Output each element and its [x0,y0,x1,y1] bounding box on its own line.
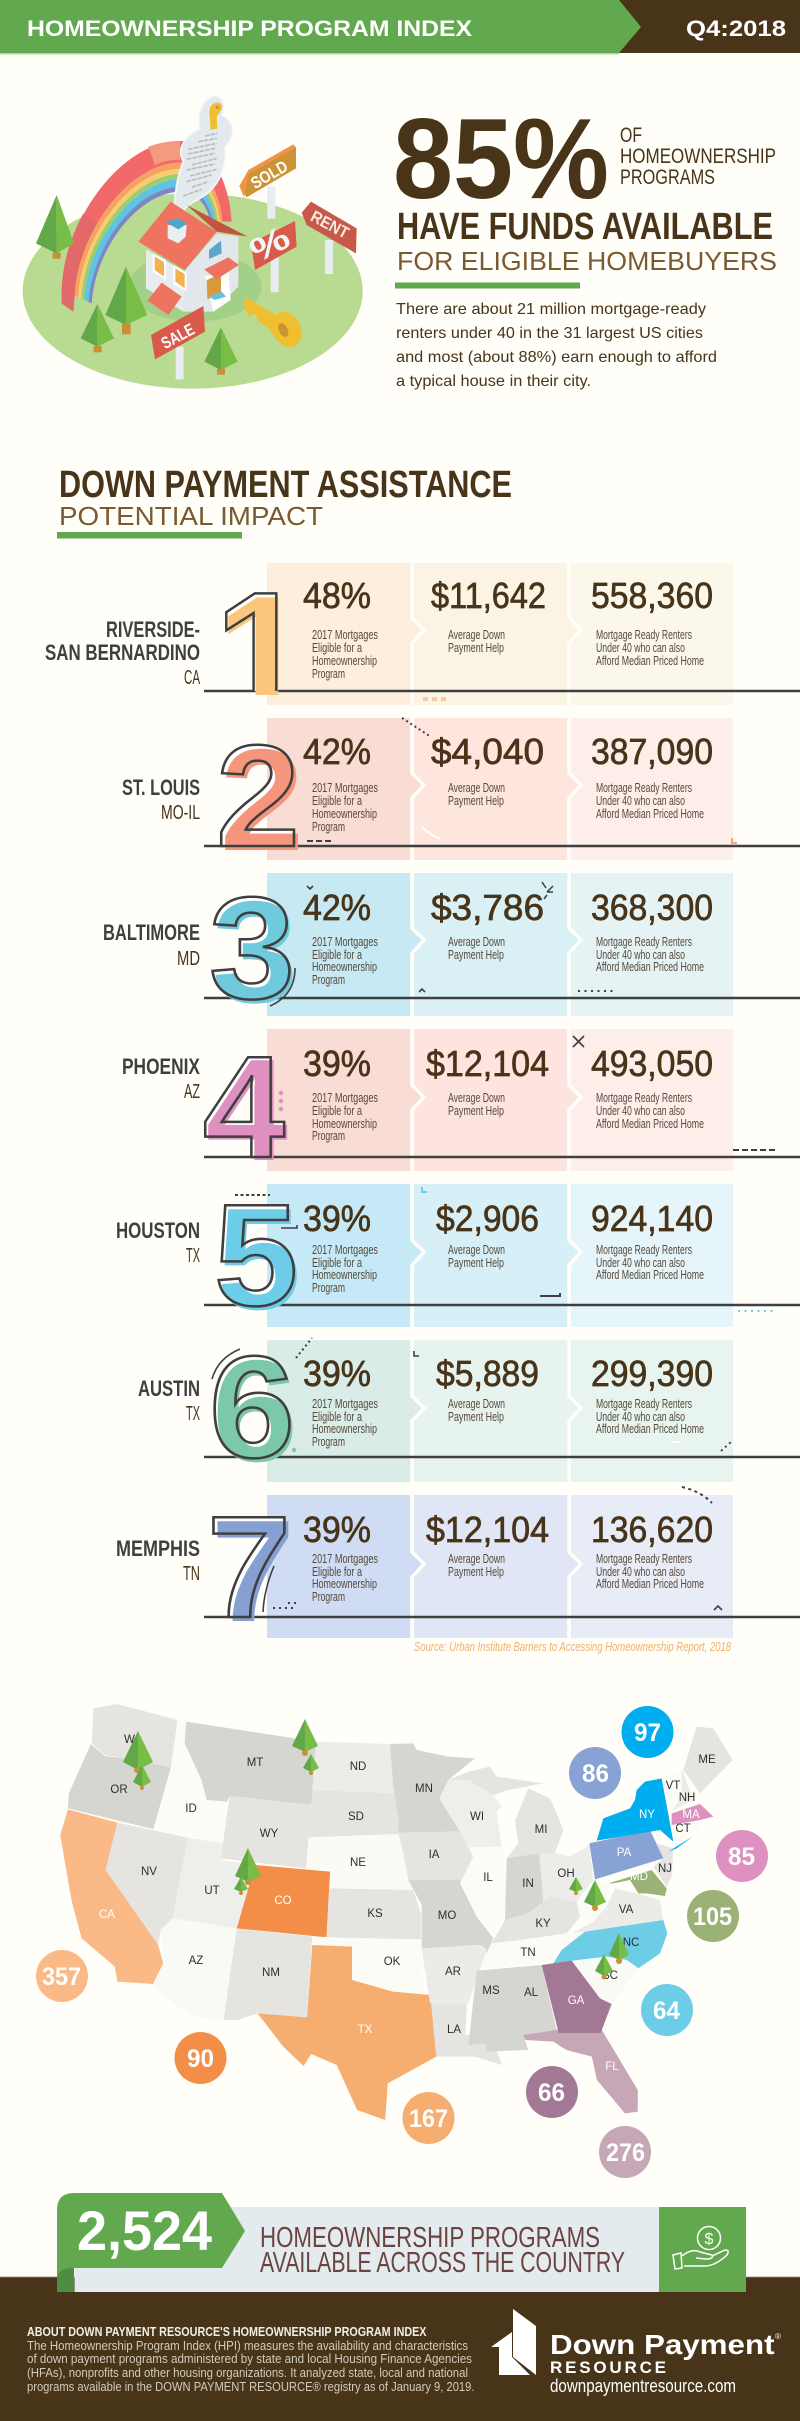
stat: share eligible: Program [312,667,345,681]
sign: percent: % [244,219,296,270]
intro paragraph [396,301,717,390]
stat: share eligible: Eligible for a [312,948,362,962]
stat: mortgage ready renters: Under 40 who can also [596,641,685,655]
stat: share eligible: Eligible for a [312,794,362,808]
city [138,1376,200,1425]
logo: Down Payment Resource: RESOURCE [550,2358,666,2377]
map state labels: ND [350,1761,366,1773]
stat: mortgage ready renters: Under 40 who can also [596,1565,685,1579]
stat: share eligible: 2017 Mortgages [312,1552,378,1566]
headline statistic: PROGRAMS [620,166,715,189]
stat: share eligible: Homeownership [312,1577,377,1591]
map state labels: CA [99,1909,115,1921]
icon: document scroll and key [174,96,233,221]
city: MO-IL [161,802,200,824]
section heading: DOWN PAYMENT ASSISTANCE [59,464,512,506]
logo: Down Payment Resource [491,2309,781,2396]
about text block: (HFAs), nonprofits and other housing organizations. It analyzed state, local and national [27,2365,468,2380]
stat: down payment help: Payment Help [448,794,504,808]
section heading [57,464,512,538]
stat: mortgage ready renters: Afford Median Priced Home [596,1268,704,1282]
numeral 1: 1 [215,557,307,745]
state program count: 167: 167 [409,2105,448,2133]
map state labels: OH [557,1868,575,1880]
numeral 4: 4 [206,1029,288,1191]
about text block: The Homeownership Program Index (HPI) measures the availability and characteristics [27,2338,468,2353]
stat: mortgage ready renters: 558,360 [591,575,713,616]
stat: mortgage ready renters [591,731,713,821]
stat: share eligible: 2017 Mortgages [312,935,378,949]
city [45,617,200,689]
icon: tree [204,327,238,375]
stat: share eligible: Program [312,973,345,987]
city: PHOENIX [122,1054,200,1079]
stat: down payment help: Average Down [448,935,505,949]
map state labels: MT [247,1757,263,1769]
state program count: 357 [36,1950,88,2002]
city: AZ [184,1081,200,1103]
stat: down payment help: Average Down [448,628,505,642]
stat: mortgage ready renters [591,575,713,668]
row 2: St. Louis [122,715,800,881]
stat: share eligible: Program [312,1129,345,1143]
stat: mortgage ready renters: Mortgage Ready Renters [596,781,692,795]
stat: share eligible: Eligible for a [312,1256,362,1270]
map state labels: LA [447,2024,461,2036]
stat: mortgage ready renters [591,1198,713,1282]
stat: share eligible [303,731,378,834]
map state labels: KY [535,1918,551,1930]
stat: mortgage ready renters: Afford Median Priced Home [596,807,704,821]
stat: share eligible: Eligible for a [312,1565,362,1579]
city: SAN BERNARDINO [45,640,200,665]
state program count: 97: 97 [634,1719,661,1747]
stat: down payment help [426,1509,549,1579]
stat: share eligible: Eligible for a [312,1104,362,1118]
map state labels: ME [698,1754,716,1766]
city: BALTIMORE [103,920,200,945]
stat: share eligible: Program [312,1590,345,1604]
city: HOUSTON [116,1218,200,1243]
stat: down payment help: $4,040 [431,731,544,772]
stat: down payment help: Payment Help [448,1565,504,1579]
stat: mortgage ready renters: Under 40 who can also [596,794,685,808]
city: TX [186,1245,200,1267]
stat: down payment help [436,1353,539,1424]
stat: mortgage ready renters: 368,300 [591,887,713,928]
stat: mortgage ready renters: 387,090 [591,731,713,772]
stat: down payment help: Payment Help [448,1256,504,1270]
numeral 3: 3 [212,871,298,1033]
map state labels: NE [350,1857,366,1869]
map state labels: MA [682,1809,700,1821]
map state labels: AR [445,1966,461,1978]
stat: down payment help: $5,889 [436,1353,539,1394]
stat: mortgage ready renters: 136,620 [591,1509,713,1550]
sign: rent [302,202,357,274]
row 1: Riverside-San Bernardino [46,563,800,705]
stat: share eligible: 2017 Mortgages [312,628,378,642]
state program count: 357: 357 [42,1963,81,1991]
state program count: 66: 66 [538,2079,565,2107]
sign: sold: SOLD [247,157,291,193]
stat: share eligible: 48% [303,575,371,616]
city: AUSTIN [138,1376,200,1401]
map state labels: MI [535,1824,547,1836]
state program count: 276 [599,2126,651,2178]
stat: mortgage ready renters: Mortgage Ready Renters [596,628,692,642]
stat: mortgage ready renters: Under 40 who can also [596,1256,685,1270]
map state labels: SD [348,1811,364,1823]
stat: share eligible [303,1509,378,1604]
stat: share eligible: 2017 Mortgages [312,1243,378,1257]
stat: down payment help: Average Down [448,1243,505,1257]
icon: rainbow [62,141,232,312]
icon: hand holding coin [673,2226,728,2269]
stat: mortgage ready renters [591,887,713,974]
map state labels: AL [524,1987,539,1999]
stat: mortgage ready renters: Mortgage Ready Renters [596,1397,692,1411]
city: MD [177,948,200,970]
city [103,920,200,970]
stat: down payment help [431,731,544,808]
sign: sale [151,306,205,379]
map state labels: AZ [189,1955,203,1967]
map state labels: NC [623,1937,639,1949]
stat: down payment help: $12,104 [426,1043,549,1084]
stat: share eligible: Program [312,820,345,834]
state program count: 66 [526,2066,578,2118]
stat: mortgage ready renters: Afford Median Priced Home [596,654,704,668]
stat: mortgage ready renters [591,1043,713,1131]
total programs banner: AVAILABLE ACROSS THE COUNTRY [260,2247,625,2279]
map state labels: GA [568,1995,585,2007]
state program count: 105: 105 [693,1903,732,1931]
stat: share eligible: Homeownership [312,807,377,821]
state program count: 276: 276 [606,2139,645,2167]
stat: share eligible: Homeownership [312,1422,377,1436]
city: TX [186,1403,200,1425]
stat: mortgage ready renters: Afford Median Priced Home [596,1577,704,1591]
stat: down payment help: Average Down [448,1091,505,1105]
numeral 2: 2 [216,715,300,877]
map state labels: NY [639,1809,655,1821]
city: TN [183,1563,200,1585]
city [116,1218,200,1267]
stat: mortgage ready renters: Under 40 who can also [596,948,685,962]
stat: down payment help [431,575,546,655]
city: MEMPHIS [116,1536,200,1561]
icon: house [138,202,248,315]
stat: down payment help [436,1198,539,1270]
stat: down payment help: $11,642 [431,575,546,616]
icon: tree [36,195,74,259]
numeral 7: 7 [211,1490,295,1652]
stat: mortgage ready renters: 493,050 [591,1043,713,1084]
map state labels: MS [482,1985,500,1997]
map state labels: NM [262,1967,280,1979]
map state labels [99,1734,716,2073]
sign: sale: SALE [158,320,198,353]
city [122,1054,200,1103]
icon: hand holding coin: $ [705,2231,714,2248]
state program count: 90: 90 [187,2045,214,2073]
about text block [27,2324,474,2394]
stat: share eligible: 42% [303,731,371,772]
stat: share eligible: Homeownership [312,1268,377,1282]
headline statistic: 85% [393,96,609,223]
city: ST. LOUIS [122,775,200,800]
state program count: 64 [641,1984,693,2036]
stat: share eligible: Homeownership [312,1117,377,1131]
intro paragraph: renters under 40 in the 31 largest US cities [396,325,703,342]
numeral 4: 4 [203,1026,285,1188]
stat: mortgage ready renters: 299,390 [591,1353,713,1394]
stat: share eligible [303,1353,378,1449]
stat: share eligible: 39% [303,1353,371,1394]
US map: western and southern state shapes [60,1704,638,2120]
numeral 1: 1 [217,561,309,749]
stat: down payment help: Payment Help [448,948,504,962]
icon: tree [81,304,114,352]
stat: mortgage ready renters: Mortgage Ready Renters [596,1091,692,1105]
stat: down payment help: Average Down [448,1397,505,1411]
state program count: 90 [174,2032,226,2084]
header banner [0,0,800,54]
map state labels: OK [384,1956,401,1968]
logo: Down Payment Resource: downpaymentresource.com [550,2376,736,2396]
map state labels: VA [619,1904,634,1916]
stat: down payment help [426,1043,549,1118]
stat: share eligible: 2017 Mortgages [312,1091,378,1105]
row 5: Houston [116,1174,800,1340]
stat: mortgage ready renters: Mortgage Ready Renters [596,1243,692,1257]
stat: share eligible: Homeownership [312,960,377,974]
intro paragraph: a typical house in their city. [396,373,591,390]
map state labels: PA [617,1847,632,1859]
stat: down payment help: $2,906 [436,1198,539,1239]
numeral 7: 7 [207,1486,291,1648]
state program count: 85: 85 [728,1843,755,1871]
stat: share eligible: Program [312,1281,345,1295]
stat: down payment help: Payment Help [448,1410,504,1424]
stat: share eligible [303,887,378,987]
city [122,775,200,824]
stat: down payment help: $3,786 [431,887,544,928]
city: RIVERSIDE- [106,617,200,642]
stat: share eligible: Homeownership [312,654,377,668]
map state labels: ID [185,1803,197,1815]
numeral 1 [225,592,278,695]
numeral 3: 3 [209,867,295,1029]
map state labels: MD [630,1871,648,1883]
map state labels: MO [438,1910,456,1922]
stat: mortgage ready renters: 924,140 [591,1198,713,1239]
row 4: Phoenix [122,1026,800,1191]
stat: down payment help: Average Down [448,1552,505,1566]
numeral 2: 2 [220,719,304,881]
stat: mortgage ready renters: Under 40 who can also [596,1104,685,1118]
headline statistic: FOR ELIGIBLE HOMEBUYERS [397,246,777,276]
icon: key [243,297,307,352]
stat: mortgage ready renters: Afford Median Priced Home [596,960,704,974]
stat: mortgage ready renters: Under 40 who can also [596,1410,685,1424]
about text block: programs available in the DOWN PAYMENT RESOURCE® registry as of January 9, 2019. [27,2379,474,2394]
map state labels: OR [110,1784,128,1796]
stat: share eligible: 39% [303,1509,371,1550]
hero illustration: house, rainbow, signs and trees [23,96,363,389]
map state labels: IL [483,1872,493,1884]
stat: down payment help: $12,104 [426,1509,549,1550]
map state labels: WY [260,1828,279,1840]
icon: tree [105,267,147,334]
map state labels: IN [522,1878,534,1890]
state program count: 86: 86 [582,1760,609,1788]
map state labels: VT [666,1780,680,1792]
headline statistic: OF [620,124,642,147]
state program count: 64: 64 [653,1997,680,2025]
map state labels: CT [675,1823,691,1835]
sign: percent [244,219,297,292]
stat: mortgage ready renters: Afford Median Priced Home [596,1117,704,1131]
stat: share eligible [303,575,378,681]
stat: down payment help [431,887,544,962]
stat: share eligible: 42% [303,887,371,928]
section heading: POTENTIAL IMPACT [59,501,323,531]
numeral 5: 5 [214,1174,298,1336]
stat: mortgage ready renters [591,1509,713,1591]
total programs banner: 2,524 [77,2199,212,2262]
stat: mortgage ready renters [591,1353,713,1436]
total programs banner [57,2193,746,2292]
numeral 4: 4 [203,1026,285,1188]
stat: down payment help: Payment Help [448,641,504,655]
numeral 5: 5 [214,1174,298,1336]
numeral 5: 5 [217,1178,301,1340]
intro paragraph: There are about 21 million mortgage-ready [396,301,706,318]
footer background [0,2276,800,2421]
map state labels: KS [367,1908,383,1920]
state program count: 167 [402,2092,454,2144]
US map: central and eastern state shapes [390,1727,733,2052]
total programs banner: HOMEOWNERSHIP PROGRAMS [260,2222,600,2254]
stat: share eligible: Eligible for a [312,1410,362,1424]
stat: share eligible: Eligible for a [312,641,362,655]
about text block: ABOUT DOWN PAYMENT RESOURCE'S HOMEOWNERSHIP PROGRAM INDEX [27,2324,427,2339]
stat: share eligible [303,1043,378,1143]
state program count: 85 [716,1830,768,1882]
numeral 6: 6 [209,1326,295,1488]
row 6: Austin [138,1326,800,1492]
logo: Down Payment Resource: ® [775,2332,781,2341]
numeral 1: 1 [215,557,307,745]
stat: mortgage ready renters: Mortgage Ready Renters [596,935,692,949]
city: CA [184,667,200,689]
row 7: Memphis [116,1486,800,1652]
numeral 3: 3 [209,867,295,1029]
map state labels: NJ [658,1863,672,1875]
stat: mortgage ready renters: Mortgage Ready Renters [596,1552,692,1566]
state program count: 97 [622,1706,674,1758]
stat: share eligible: 2017 Mortgages [312,1397,378,1411]
map state labels: IA [429,1849,440,1861]
stat: share eligible: 39% [303,1043,371,1084]
map state labels: SC [602,1970,618,1982]
header banner: Q4:2018 [686,16,786,41]
map state labels: NV [141,1866,157,1878]
stat: share eligible: 39% [303,1198,371,1239]
stat: share eligible: 2017 Mortgages [312,781,378,795]
numeral 6: 6 [209,1326,295,1488]
map state labels: UT [204,1885,220,1897]
headline statistic [393,96,777,288]
map state labels: TN [520,1947,536,1959]
sign: rent: RENT [307,207,352,243]
map state labels: TX [358,2024,373,2036]
city [116,1536,200,1585]
numeral 6: 6 [212,1330,298,1492]
map state labels: CO [274,1895,292,1907]
numeral 7: 7 [207,1486,291,1648]
map trees [123,1719,629,1980]
stat: share eligible: Program [312,1435,345,1449]
numeral 2: 2 [216,715,300,877]
sign: sold [239,144,296,219]
state program count: 105 [687,1890,739,1942]
map state labels: WI [470,1811,484,1823]
intro paragraph: and most (about 88%) earn enough to afford [396,349,717,366]
state program count: 86 [569,1747,621,1799]
map state labels: FL [605,2061,619,2073]
map state labels: MN [415,1783,433,1795]
stat: share eligible [303,1198,378,1295]
logo: Down Payment Resource: Down Payment [550,2329,774,2360]
header banner: HOMEOWNERSHIP PROGRAM INDEX [27,16,472,41]
stat: down payment help: Payment Help [448,1104,504,1118]
stat: mortgage ready renters: Afford Median Priced Home [596,1422,704,1436]
map state labels: NH [679,1792,695,1804]
row 3: Baltimore [103,867,800,1033]
map state labels: WA [124,1734,142,1746]
about text block: of down payment programs administered by state and local Housing Finance Agencies [27,2351,472,2366]
stat: down payment help: Average Down [448,781,505,795]
